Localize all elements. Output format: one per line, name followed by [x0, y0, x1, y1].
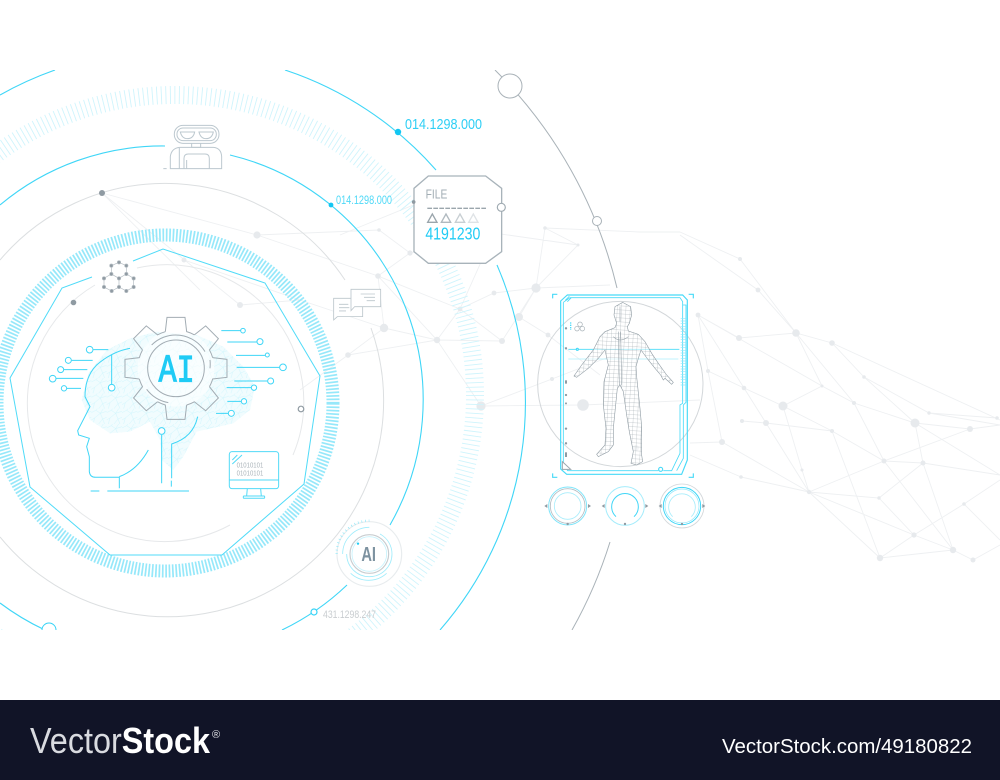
wireframe figure: [570, 298, 677, 468]
gauge 1: [544, 487, 591, 525]
gray ring: [0, 183, 384, 617]
network mesh background: [102, 190, 1000, 562]
head outline: [78, 348, 198, 491]
scan circle: [538, 301, 703, 467]
icon: AI badge: AI: [361, 544, 376, 566]
outer cyan arc: [0, 70, 525, 630]
icon: AI badge: [337, 521, 402, 586]
icon: monitor: 01010101: [237, 460, 263, 469]
icon: monitor: [229, 452, 279, 498]
panel: file card: [334, 176, 505, 320]
icon: robot: [163, 125, 222, 169]
arc markers: [42, 74, 602, 630]
icon: monitor: 01010101: [237, 468, 263, 477]
brain mesh: [82, 332, 255, 470]
label: bottom data code: 431.1298.247: [323, 609, 376, 621]
faint hatched outer ring: [0, 95, 475, 695]
panel: human body scan: [538, 294, 705, 528]
card connectors: [412, 200, 505, 211]
gauge 3: [659, 484, 705, 528]
label: middle data code: 014.1298.000: [336, 193, 392, 207]
footer logo: VectorStock: [30, 720, 211, 761]
circuit lines: [49, 328, 286, 434]
panel: AI brain with gear: [49, 261, 286, 498]
AI gear label: AI: [159, 350, 195, 394]
brain texture: [82, 332, 255, 470]
card dashed divider and triangles: [427, 208, 486, 222]
icon: molecule: [102, 261, 135, 293]
inner gray ring: [27, 265, 304, 542]
far gray arc: [495, 70, 617, 630]
dense hatched ring: [0, 235, 333, 571]
frame details: [562, 322, 585, 469]
label: top data code: 014.1298.000: [405, 116, 482, 133]
concentric rings and arcs: [0, 70, 618, 630]
gauge 2: [602, 487, 648, 525]
scan frame: [553, 294, 693, 477]
footer image id: VectorStock.com/49180822: [722, 736, 972, 758]
card title: FILE: [426, 186, 447, 201]
footer bar: [0, 700, 1000, 780]
gear: [125, 317, 227, 419]
icon: chat bubbles: [334, 289, 381, 320]
cyan polygon: [10, 249, 320, 555]
card frame: [414, 176, 502, 263]
card number: 4191230: [425, 224, 480, 244]
middle cyan arc: [0, 146, 423, 630]
footer registered mark: ®: [212, 729, 220, 741]
